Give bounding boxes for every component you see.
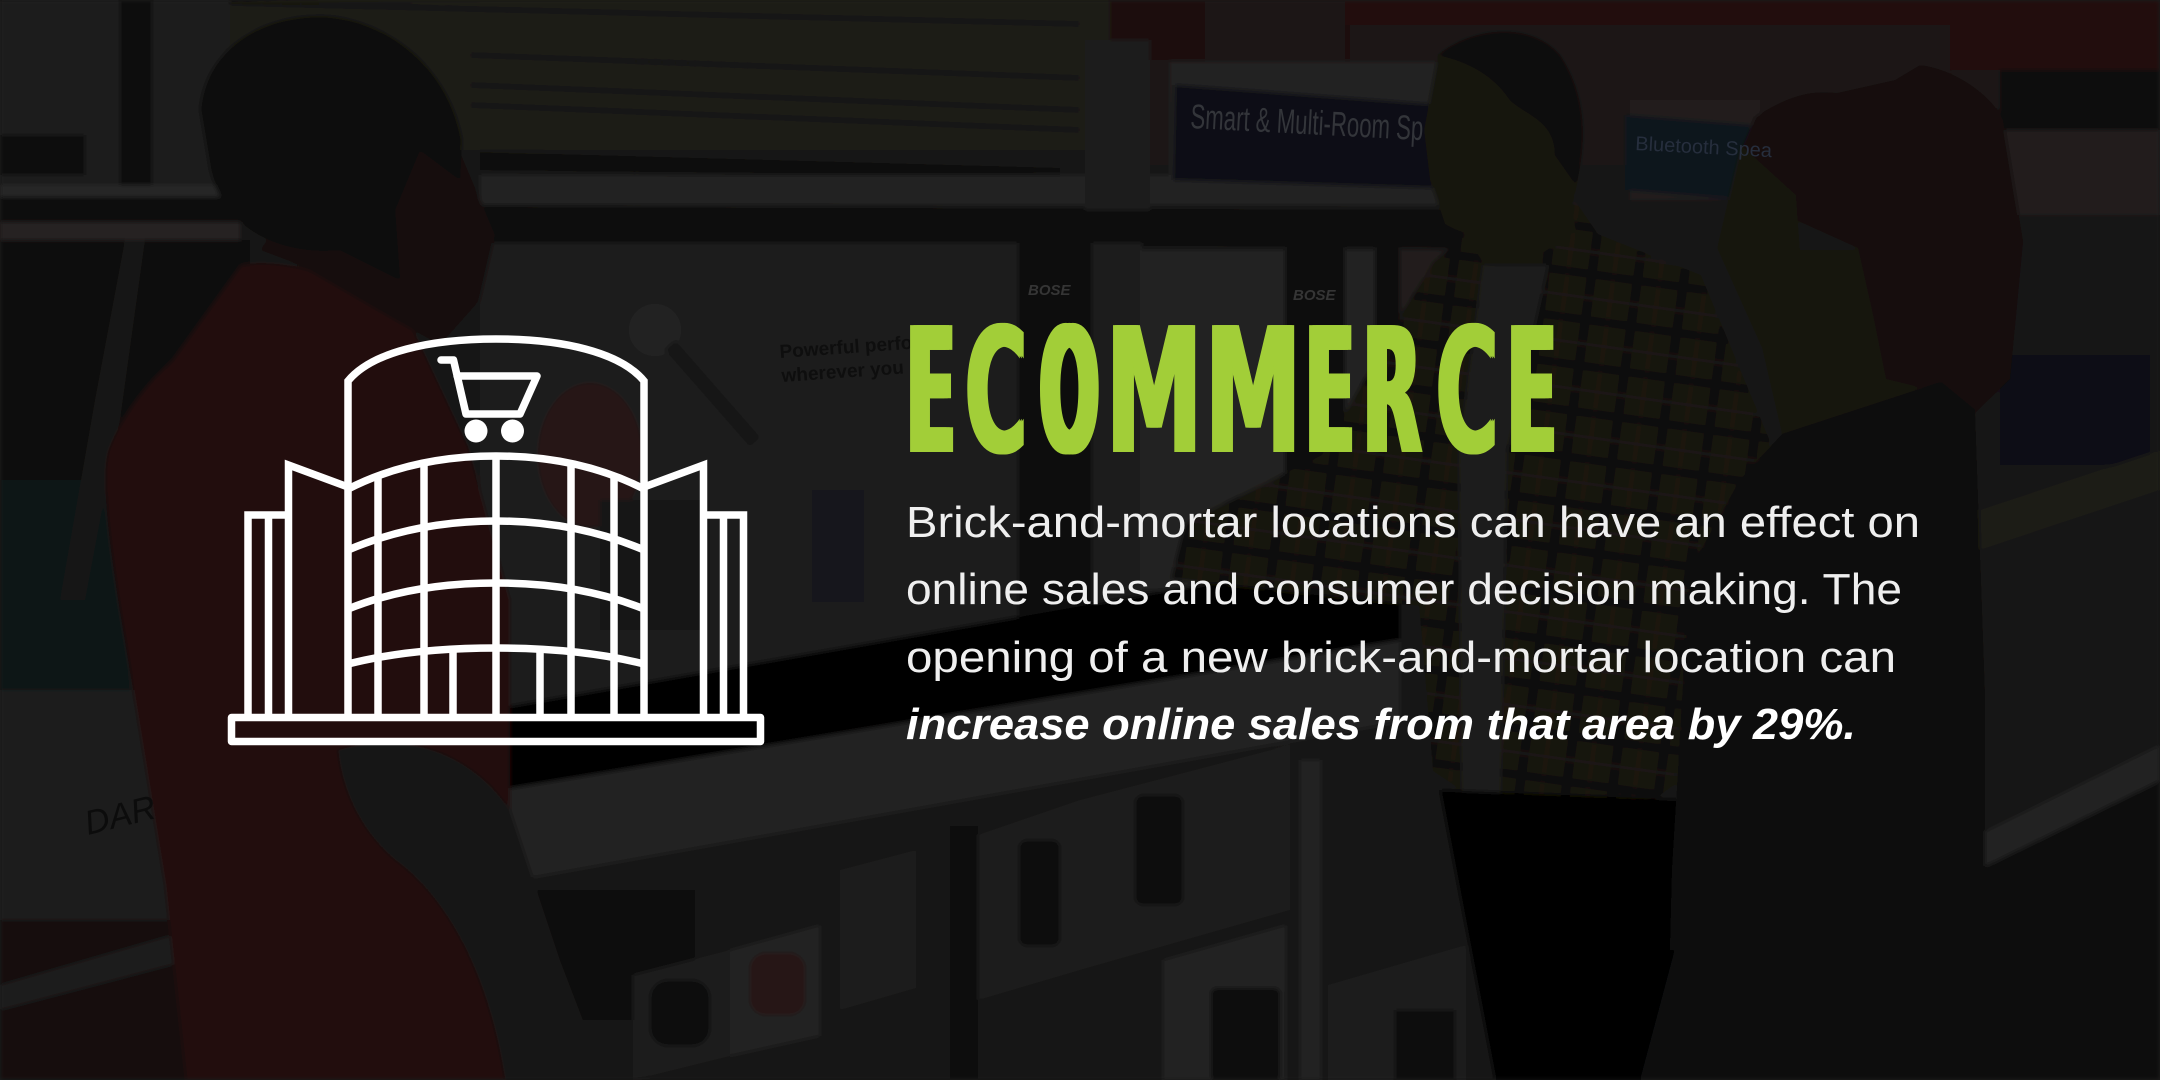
icon part: plinth: [232, 718, 760, 742]
man in red polo: [106, 263, 520, 1080]
title: M: [1205, 291, 1301, 494]
title: [907, 291, 1556, 494]
icon part: glass mullions: [378, 456, 614, 714]
title: C: [965, 291, 1027, 494]
background signage text: wherever you: [780, 357, 905, 387]
icon part: right wing: [644, 465, 744, 714]
title: R: [1363, 291, 1421, 494]
title: E: [907, 291, 955, 494]
wall and red ceiling band: [1110, 0, 2160, 165]
background signage text: DAR: [81, 789, 160, 843]
background signage text: Powerful perfo: [779, 333, 913, 363]
body text: opening of a new brick-and-mortar location can: [906, 633, 1896, 682]
store display panel: [480, 243, 1018, 712]
icon part: rear drum with arched top: [348, 339, 644, 714]
background signage text: [81, 98, 1773, 843]
woman with ponytail: [1741, 65, 2023, 413]
title: E: [1306, 291, 1354, 494]
background signage text: BOSE: [1293, 287, 1337, 304]
dark counter and white shelf diagonals: [500, 550, 1400, 790]
background signage text: BOSE: [1028, 282, 1072, 299]
title: E: [1508, 291, 1556, 494]
body text: increase online sales from that area by 29%.: [906, 700, 1856, 749]
title: C: [1436, 291, 1498, 494]
background signage text: Bluetooth Spea: [1635, 133, 1773, 162]
icon: shopping cart: [441, 360, 537, 442]
background signage text: Smart & Multi-Room Sp: [1190, 98, 1424, 149]
icon part: curved glass floors: [348, 456, 644, 664]
slatwall: [230, 0, 1110, 150]
icon part: left wing: [248, 465, 348, 714]
right wall merch: [2000, 70, 2160, 132]
man in plaid shirt: [1171, 193, 1770, 840]
in-store signs: [1170, 62, 1450, 190]
title: O: [1040, 291, 1098, 494]
body text: online sales and consumer decision making. The: [906, 565, 1902, 614]
pegboard band: [480, 205, 1480, 248]
upper left fixtures: [0, 0, 125, 185]
title: M: [1106, 291, 1202, 494]
body text: Brick-and-mortar locations can have an effect on: [906, 498, 1920, 547]
